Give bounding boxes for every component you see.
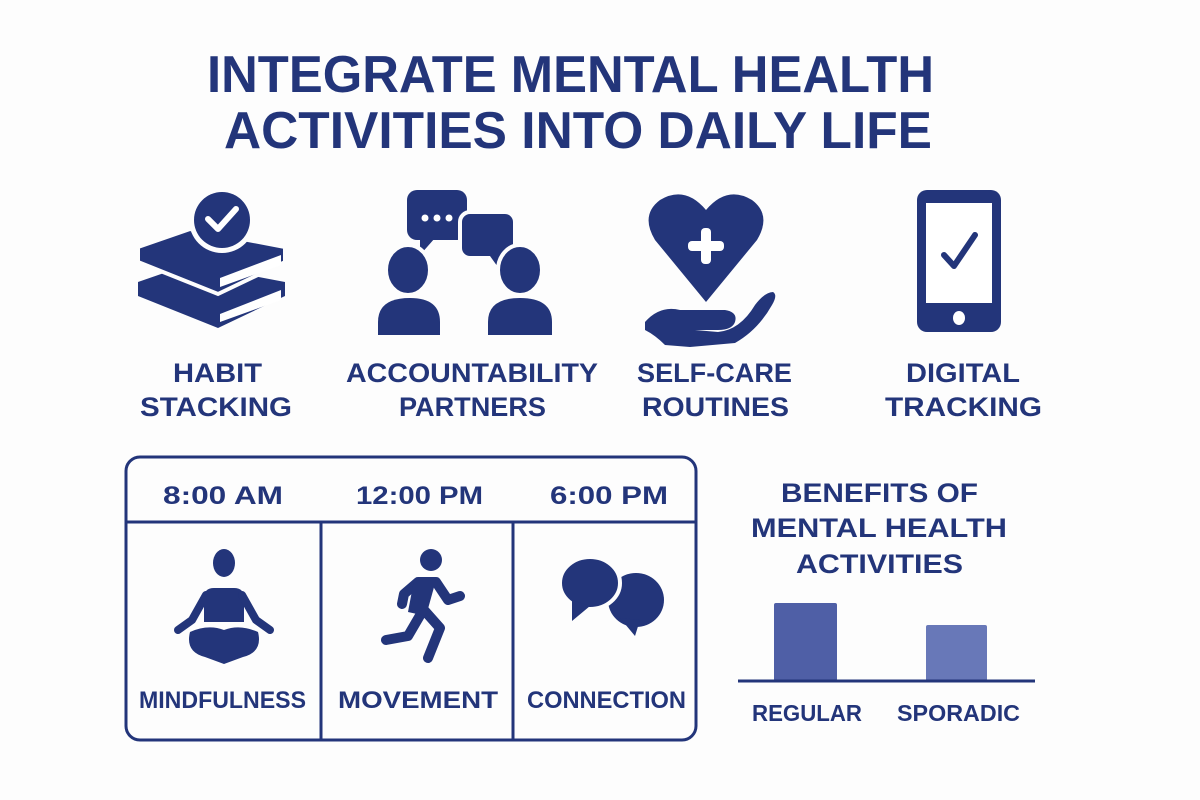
label: digital tracking: [885, 358, 1042, 422]
heading: benefits: BENEFITS OF: [781, 478, 978, 508]
icon: accountability partners: [378, 190, 552, 335]
icon: meditation: [178, 549, 270, 664]
icon: phone with check: [917, 190, 1001, 332]
label: self-care routines: [637, 358, 792, 422]
bar chart: REGULAR: [752, 700, 862, 726]
label: self-care routines: SELF-CARE: [637, 358, 792, 388]
label: mindfulness: MINDFULNESS: [139, 687, 306, 714]
title: INTEGRATE MENTAL HEALTH: [207, 46, 934, 104]
time: 12pm: 12:00 PM: [356, 482, 483, 510]
icon: books with check: [138, 187, 285, 328]
label: habit stacking: STACKING: [140, 392, 292, 422]
heading: benefits: ACTIVITIES: [796, 549, 963, 579]
time: 6pm: 6:00 PM: [550, 482, 668, 510]
title: ACTIVITIES INTO DAILY LIFE: [224, 102, 932, 160]
icon: runner: [386, 549, 460, 658]
icon: heart in hand: [645, 194, 775, 347]
label: accountability partners: ACCOUNTABILITY: [346, 358, 598, 388]
label: digital tracking: TRACKING: [885, 392, 1042, 422]
label: connection: CONNECTION: [527, 687, 686, 714]
bar chart: SPORADIC: [897, 700, 1020, 726]
label: self-care routines: ROUTINES: [642, 392, 789, 422]
title: [207, 46, 934, 160]
time: 8am: 8:00 AM: [163, 482, 283, 510]
label: habit stacking: [140, 358, 292, 422]
heading: benefits: MENTAL HEALTH: [751, 513, 1007, 543]
label: accountability partners: [346, 358, 598, 422]
label: movement: MOVEMENT: [338, 687, 498, 714]
label: digital tracking: DIGITAL: [906, 358, 1020, 388]
bar chart: [738, 603, 1035, 726]
icon: chat bubbles: [560, 557, 664, 636]
label: habit stacking: HABIT: [173, 358, 263, 388]
panel: daily schedule: [126, 457, 696, 740]
heading: benefits: [751, 478, 1007, 579]
label: accountability partners: PARTNERS: [399, 392, 546, 422]
